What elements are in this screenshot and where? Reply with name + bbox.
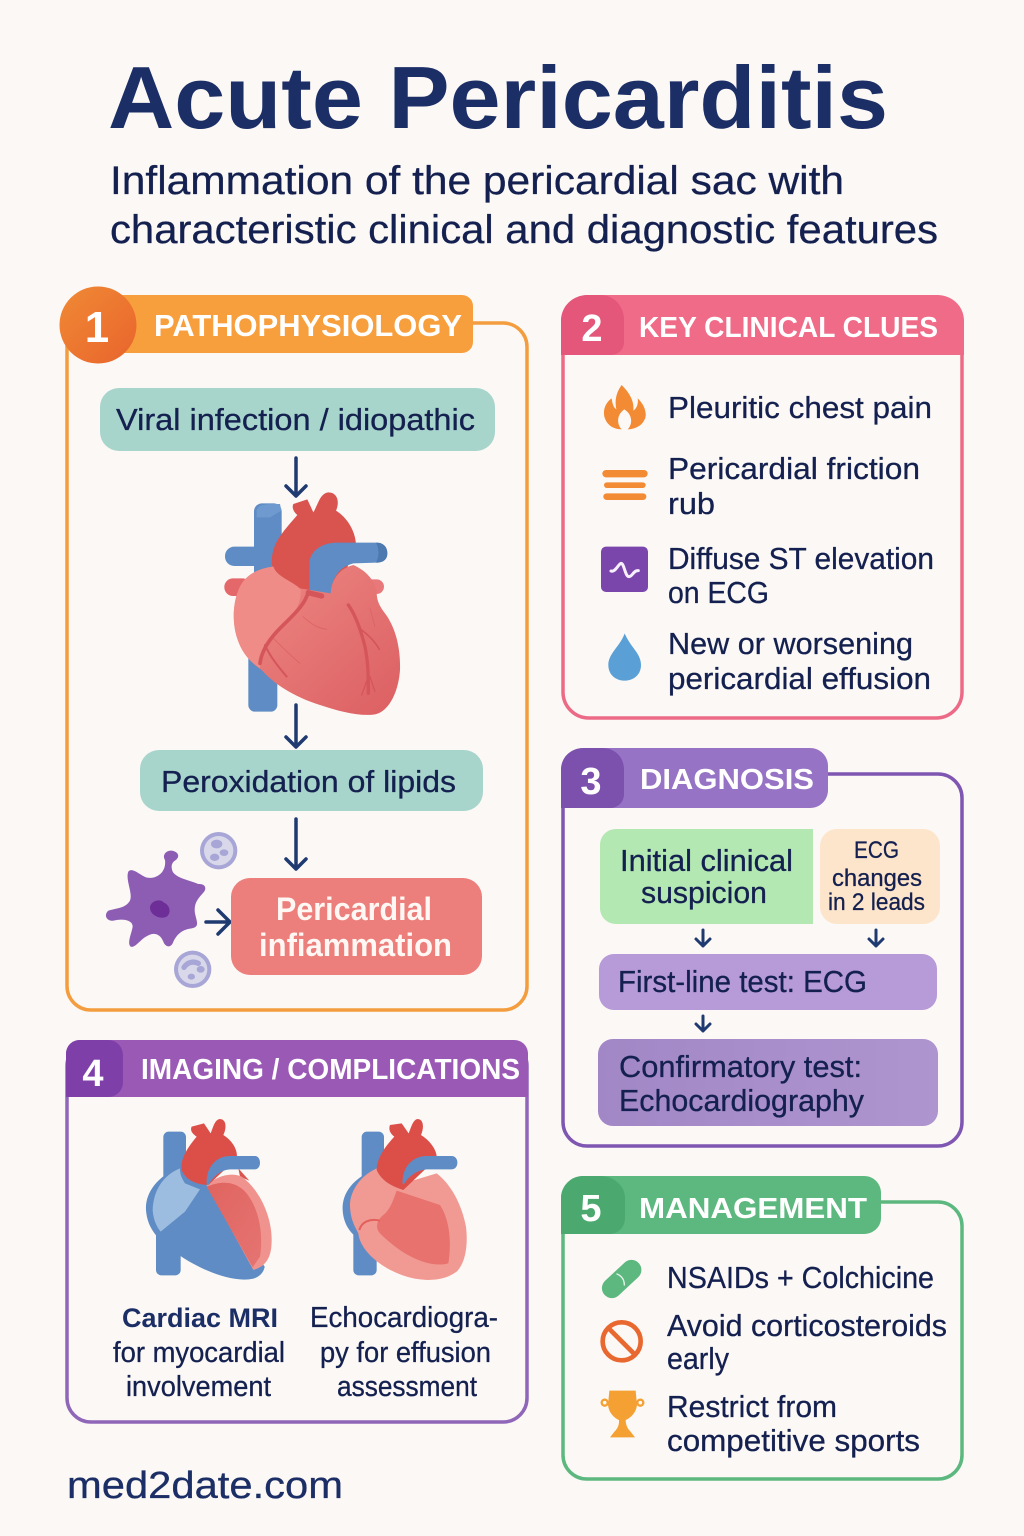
icon: ECG square <box>601 547 648 592</box>
header: imaging and complications <box>66 1040 528 1097</box>
box: peroxidation of lipids: Peroxidation of lipids <box>161 764 456 799</box>
box: initial clinical suspicion: Initial clinical <box>620 843 793 878</box>
icon: flame <box>604 385 646 429</box>
caption: cardiac MRI: Cardiac MRI <box>122 1303 278 1333</box>
box: viral infection <box>100 388 495 451</box>
icon: pill <box>598 1256 646 1302</box>
clue: friction rub <box>602 451 920 521</box>
header: diagnosis: DIAGNOSIS <box>640 764 814 796</box>
arrow: to peroxidation <box>286 705 306 747</box>
treatment: avoid corticosteroids: early <box>667 1341 729 1376</box>
panel: imaging and complications <box>66 1040 528 1422</box>
panel: pathophysiology <box>60 286 527 1010</box>
arrow: ECG changes to ECG <box>869 930 883 946</box>
arrow: first-line to confirmatory <box>696 1016 710 1031</box>
subtitle: characteristic clinical and diagnostic features <box>110 208 938 252</box>
clue: pleuritic chest pain <box>604 385 932 429</box>
caption: echocardiography: Echocardiogra- <box>310 1302 498 1334</box>
header: imaging and complications: IMAGING / COMPLICATIONS <box>141 1054 520 1086</box>
header: key clinical clues: KEY CLINICAL CLUES <box>639 312 938 344</box>
icon: water drop <box>608 633 641 681</box>
clue: pleuritic chest pain: Pleuritic chest pain <box>668 390 932 425</box>
caption: echocardiography: py for effusion <box>320 1337 491 1369</box>
treatment: NSAIDs and colchicine: NSAIDs + Colchicine <box>667 1260 934 1295</box>
arrow: suspicion to ECG <box>696 930 710 946</box>
panel: management <box>561 1176 962 1479</box>
header: management: MANAGEMENT <box>639 1193 867 1225</box>
arrow: macrophage to inflammation <box>206 910 230 934</box>
icon: macrophage and immune cells <box>106 832 237 988</box>
caption: echocardiography <box>310 1302 498 1403</box>
box: ECG changes: changes <box>832 865 922 892</box>
header: management: 5 <box>580 1188 602 1230</box>
icon: trophy <box>602 1391 643 1437</box>
box: first-line test: First-line test: ECG <box>618 964 867 999</box>
clue: ST elevation <box>601 541 934 610</box>
treatment: restrict from sports: competitive sports <box>667 1423 920 1458</box>
footer: website: med2date.com <box>67 1465 343 1507</box>
box: pericardial inflammation: infiammation <box>259 927 452 963</box>
box: initial clinical suspicion: suspicion <box>641 875 767 910</box>
title: Acute Pericarditis <box>108 48 888 147</box>
panel: key clinical clues <box>561 295 964 718</box>
header: pathophysiology: PATHOPHYSIOLOGY <box>154 308 462 343</box>
icon: anatomical heart <box>224 492 400 715</box>
header: diagnosis <box>561 748 828 808</box>
treatment: avoid corticosteroids <box>603 1308 947 1376</box>
icon: cardiac MRI heart <box>146 1119 272 1280</box>
box: confirmatory test: Confirmatory test: <box>619 1049 862 1084</box>
header: key clinical clues: 2 <box>581 308 603 350</box>
box: ECG changes <box>820 829 940 924</box>
header: pathophysiology <box>60 286 473 364</box>
box: confirmatory test: Echocardiography <box>619 1083 864 1118</box>
box: first-line test <box>599 954 937 1010</box>
clue: friction rub: rub <box>668 486 715 521</box>
header: diagnosis: 3 <box>580 761 602 803</box>
icon: friction lines <box>602 470 648 500</box>
clue: pericardial effusion: pericardial effusion <box>668 661 931 696</box>
box: initial clinical suspicion <box>600 829 813 924</box>
clue: pericardial effusion <box>608 626 931 696</box>
header: imaging and complications: 4 <box>82 1053 104 1095</box>
clue: ST elevation: Diffuse ST elevation <box>668 541 934 576</box>
clue: ST elevation: on ECG <box>668 575 769 610</box>
caption: echocardiography: assessment <box>337 1371 477 1403</box>
caption: cardiac MRI: involvement <box>126 1371 271 1403</box>
header: key clinical clues <box>561 295 964 355</box>
treatment: NSAIDs and colchicine <box>598 1256 934 1302</box>
arrow: to heart <box>286 458 306 496</box>
arrow: to inflammation <box>286 819 306 869</box>
icon: prohibition sign <box>603 1322 641 1360</box>
caption: cardiac MRI: for myocardial <box>113 1337 285 1369</box>
header: pathophysiology: 1 <box>85 303 109 352</box>
panel: diagnosis <box>561 748 962 1146</box>
box: confirmatory test <box>598 1039 938 1126</box>
header: management <box>561 1176 881 1234</box>
icon: echocardiography heart <box>343 1119 467 1280</box>
treatment: restrict from sports: Restrict from <box>667 1389 837 1424</box>
subtitle <box>110 159 938 252</box>
treatment: restrict from sports <box>602 1389 920 1458</box>
subtitle: Inflammation of the pericardial sac with <box>110 159 844 203</box>
box: ECG changes: ECG <box>854 837 899 864</box>
box: peroxidation of lipids <box>140 750 483 811</box>
treatment: avoid corticosteroids: Avoid corticosteroids <box>667 1308 947 1343</box>
box: viral infection: Viral infection / idiopathic <box>116 402 475 437</box>
box: pericardial inflammation: Pericardial <box>276 891 432 927</box>
box: ECG changes: in 2 leads <box>828 889 925 916</box>
clue: pericardial effusion: New or worsening <box>668 626 913 661</box>
box: pericardial inflammation <box>231 878 482 975</box>
caption: cardiac MRI <box>113 1303 285 1403</box>
clue: friction rub: Pericardial friction <box>668 451 920 486</box>
